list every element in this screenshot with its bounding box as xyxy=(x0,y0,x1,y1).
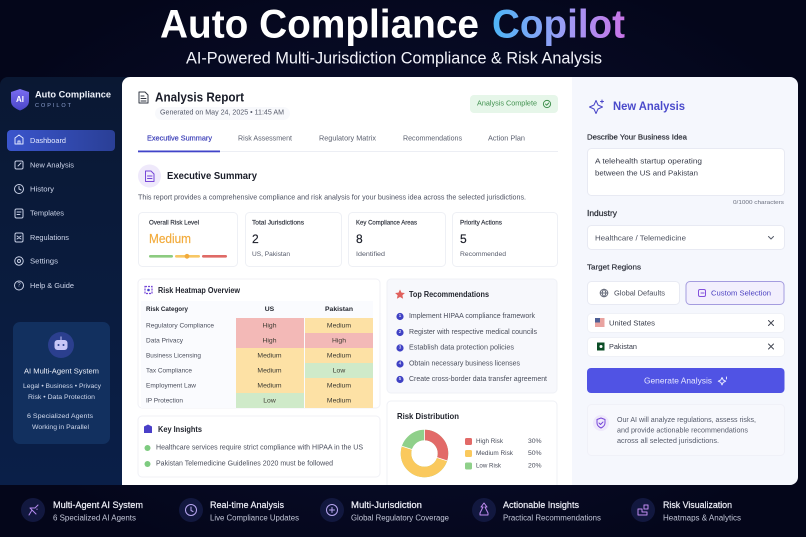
region: pakistan: Pakistan xyxy=(609,342,637,351)
info note: and provide actionable recommendations xyxy=(617,428,749,434)
feature: insights xyxy=(472,498,601,522)
heatmap table: US xyxy=(265,306,275,313)
nav: templates: Templates xyxy=(30,208,64,218)
feature: insights: Practical Recommendations xyxy=(503,514,601,522)
icon: insights xyxy=(144,424,152,433)
panel: analysis report xyxy=(122,77,572,496)
region: united states: United States xyxy=(609,318,655,328)
report heading: Analysis Report xyxy=(155,90,245,104)
nav: dashboard xyxy=(7,130,115,151)
field: business idea xyxy=(587,132,784,206)
heatmap table: Employment Law xyxy=(146,382,196,390)
panel: top recommendations: Implement HIPAA compliance framework xyxy=(409,313,535,320)
heatmap table: High xyxy=(263,322,277,330)
panel: risk heatmap: Risk Heatmap Overview xyxy=(158,286,241,295)
icon: robot xyxy=(48,332,74,358)
agent system card: Legal • Business • Privacy xyxy=(23,383,102,390)
stat: compliance areas: Identified xyxy=(356,251,385,258)
nav: settings xyxy=(15,256,58,266)
feature: multi-agent: 6 Specialized AI Agents xyxy=(53,514,136,522)
feature: multi-agent: Multi-Agent AI System xyxy=(53,500,143,510)
heatmap table: Medium xyxy=(327,398,351,404)
donut legend: High Risk xyxy=(476,438,504,445)
agent system card: AI Multi-Agent System xyxy=(24,366,99,376)
tabs: Regulatory Matrix xyxy=(319,136,377,142)
panel: sidebar xyxy=(0,77,130,485)
panel: risk heatmap xyxy=(138,279,380,408)
nav: new analysis: New Analysis xyxy=(30,160,74,170)
heatmap table xyxy=(141,301,373,408)
feature: real-time: Real-time Analysis xyxy=(210,500,284,510)
nav: dashboard: Dashboard xyxy=(30,136,66,145)
tabs: Action Plan xyxy=(488,136,525,142)
logo xyxy=(11,89,111,110)
report date: Generated on May 24, 2025 • 11:45 AM xyxy=(160,110,284,116)
nav: help: Help & Guide xyxy=(30,281,74,290)
field: industry: Healthcare / Telemedicine xyxy=(595,234,686,242)
title: Copilot xyxy=(492,2,625,46)
field: industry xyxy=(587,209,784,250)
field: target regions: Target Regions xyxy=(587,262,641,272)
panel: top recommendations: Register with respective medical councils xyxy=(409,329,537,336)
stat: overall risk: Medium xyxy=(149,232,191,246)
field: industry: Industry xyxy=(587,209,617,218)
heatmap table: Medium xyxy=(327,352,351,360)
heatmap table: High xyxy=(263,338,277,344)
agent system card xyxy=(13,322,110,444)
button: global defaults xyxy=(588,282,680,304)
donut legend: Low Risk xyxy=(476,462,502,470)
nav: settings: Settings xyxy=(30,256,58,266)
feature: real-time: Live Compliance Updates xyxy=(210,514,299,522)
donut legend: 20% xyxy=(528,462,542,470)
donut legend: Medium Risk xyxy=(476,450,514,457)
stat: overall risk: Overall Risk Level xyxy=(149,220,199,226)
icon: star xyxy=(395,290,405,299)
logo: Auto Compliance xyxy=(35,90,111,100)
agent system card: Working in Parallel xyxy=(32,424,89,431)
status badge: Analysis Complete xyxy=(477,100,537,108)
heatmap table: Medium xyxy=(257,352,282,360)
panel: top recommendations: 4 xyxy=(399,360,402,366)
panel: top recommendations: 2 xyxy=(399,329,402,335)
field: business idea: 0/1000 characters xyxy=(733,200,784,206)
nav: regulations: Regulations xyxy=(30,233,69,242)
subtitle: AI-Powered Multi-Jurisdiction Compliance & Risk Analysis xyxy=(186,48,602,68)
logo: COPILOT xyxy=(35,103,72,109)
tabs: Risk Assessment xyxy=(238,136,292,142)
panel: top recommendations: Establish data protection policies xyxy=(409,344,515,352)
tabs: Recommendations xyxy=(403,136,462,142)
stat: priority actions xyxy=(452,212,558,266)
donut legend: 50% xyxy=(528,450,542,457)
heatmap table: Medium xyxy=(257,368,282,374)
panel: key insights: Key Insights xyxy=(158,425,202,434)
feature: risk visualization xyxy=(631,498,741,522)
heatmap table: IP Protection xyxy=(146,398,183,404)
icon: sparkle xyxy=(590,100,604,114)
heatmap table: Low xyxy=(333,368,345,374)
nav: templates xyxy=(15,208,64,218)
button: generate analysis xyxy=(587,368,784,393)
heatmap table: Risk Category xyxy=(146,306,188,313)
feature: risk visualization: Risk Visualization xyxy=(663,500,732,510)
panel: key insights xyxy=(138,416,380,477)
tabs: Executive Summary xyxy=(147,136,213,142)
icon: executive summary xyxy=(138,164,161,188)
heatmap table: Regulatory Compliance xyxy=(146,322,214,330)
feature: jurisdiction: Global Regulatory Coverage xyxy=(351,514,450,522)
heatmap table: Low xyxy=(263,398,276,404)
heatmap table: High xyxy=(332,338,346,344)
heatmap table: Pakistan xyxy=(325,306,353,313)
feature: risk visualization: Heatmaps & Analytics xyxy=(663,514,741,522)
stat: jurisdictions xyxy=(246,212,342,266)
button: custom selection xyxy=(686,282,784,304)
info note xyxy=(588,404,784,456)
donut legend xyxy=(465,438,542,470)
info note: across all selected jurisdictions. xyxy=(617,438,719,445)
feature: multi-agent xyxy=(21,498,143,522)
panel: risk distribution xyxy=(386,400,558,485)
panel: top recommendations: 3 xyxy=(399,344,402,350)
agent system card: 6 Specialized Agents xyxy=(27,413,94,420)
icon: heatmap xyxy=(145,286,152,294)
title: Auto Compliance xyxy=(160,2,479,46)
panel: top recommendations: Top Recommendations xyxy=(409,290,490,299)
feature: real-time xyxy=(179,498,299,522)
agent system card: Risk • Data Protection xyxy=(28,394,95,401)
panel: new analysis: New Analysis xyxy=(613,101,685,113)
panel: top recommendations: 1 xyxy=(399,313,402,319)
panel: new analysis xyxy=(572,77,798,485)
nav: history xyxy=(14,184,54,194)
panel: risk distribution: Risk Distribution xyxy=(397,411,459,421)
heatmap table: Medium xyxy=(327,382,351,390)
info note: Our AI will analyze regulations, assess risks, xyxy=(617,417,756,424)
region: pakistan xyxy=(588,338,784,356)
donut chart xyxy=(402,430,447,472)
stat: jurisdictions: US, Pakistan xyxy=(252,251,290,258)
stat: priority actions: Priority Actions xyxy=(460,220,502,226)
stat: jurisdictions: 2 xyxy=(252,232,259,246)
panel: top recommendations: 5 xyxy=(399,376,402,382)
button: global defaults: Global Defaults xyxy=(614,288,665,298)
heatmap table: Medium xyxy=(327,322,351,330)
button: generate analysis: Generate Analysis xyxy=(644,376,712,386)
region: united states xyxy=(588,314,784,332)
button: custom selection: Custom Selection xyxy=(711,288,771,298)
status badge xyxy=(470,95,558,113)
panel: key insights: Pakistan Telemedicine Guidelines 2020 must be followed xyxy=(156,460,333,468)
feature: insights: Actionable Insights xyxy=(503,500,580,510)
field: business idea: Describe Your Business Idea xyxy=(587,132,688,142)
panel: key insights: Healthcare services require strict compliance with HIPAA in the US xyxy=(156,444,363,452)
panel: top recommendations: Create cross-border data transfer agreement xyxy=(409,376,547,383)
panel: top recommendations xyxy=(387,279,557,393)
heatmap table: Data Privacy xyxy=(146,338,184,344)
feature: jurisdiction xyxy=(320,498,450,522)
stat: jurisdictions: Total Jurisdictions xyxy=(252,220,304,226)
stat: priority actions: 5 xyxy=(460,232,467,246)
heatmap table: Tax Compliance xyxy=(146,368,192,374)
icon: report xyxy=(139,92,148,103)
field: business idea: between the US and Pakistan xyxy=(595,168,698,178)
stat: priority actions: Recommended xyxy=(460,251,506,258)
summary text: This report provides a comprehensive compliance and risk analysis for your business idea across the selected jurisdictions. xyxy=(138,194,526,202)
stat: overall risk xyxy=(138,212,238,266)
donut legend: 30% xyxy=(528,438,542,445)
stat: compliance areas: 8 xyxy=(356,232,363,246)
section heading: Executive Summary xyxy=(167,170,257,182)
heatmap table: Business Licensing xyxy=(146,352,201,360)
logo: AI xyxy=(16,95,24,104)
nav: regulations xyxy=(15,233,69,242)
field: business idea: A telehealth startup operating xyxy=(595,156,702,166)
stat: compliance areas xyxy=(348,212,446,266)
nav: history: History xyxy=(30,184,54,194)
panel: top recommendations: Obtain necessary business licenses xyxy=(409,360,520,368)
feature: jurisdiction: Multi-Jurisdiction xyxy=(351,500,422,510)
stat: compliance areas: Key Compliance Areas xyxy=(356,220,417,226)
field: target regions xyxy=(587,262,784,356)
nav: help: ? xyxy=(17,282,21,288)
tabs xyxy=(138,136,558,152)
heatmap table: Medium xyxy=(257,382,282,390)
